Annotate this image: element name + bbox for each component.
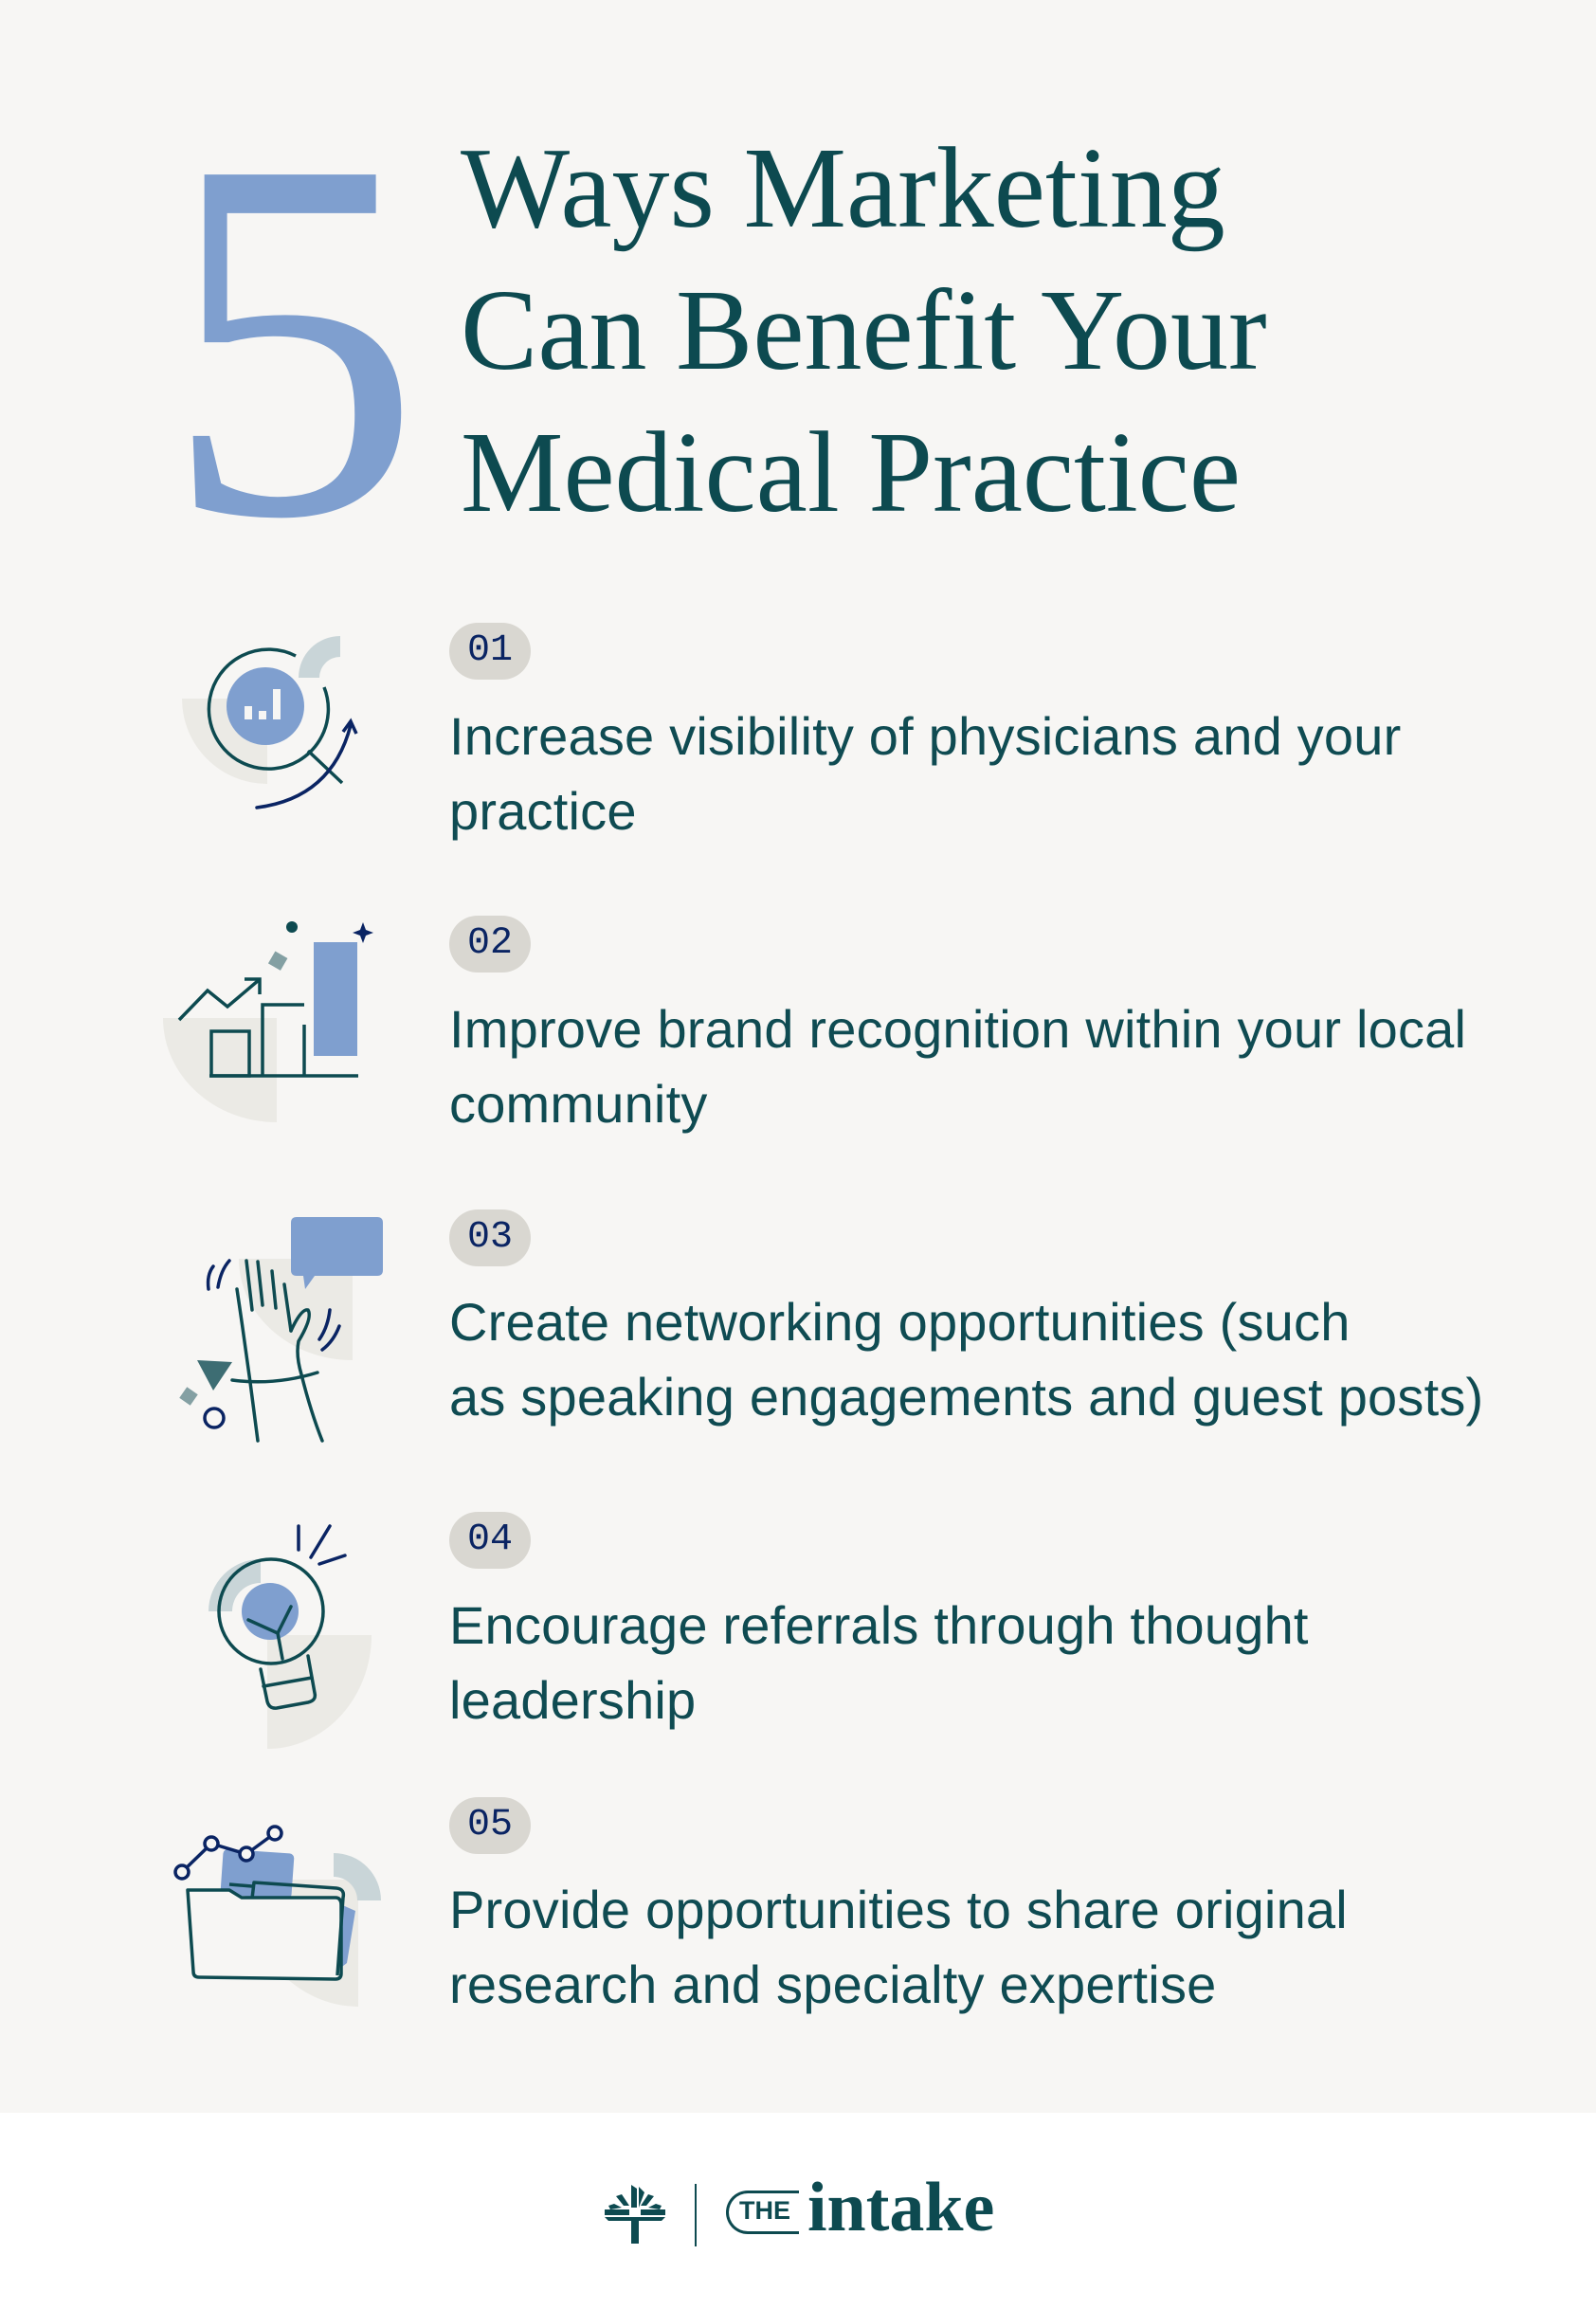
text 2: community: [449, 1074, 708, 1134]
text 4: [449, 1595, 1309, 1730]
text 2: Improve brand recognition within your local: [449, 999, 1466, 1059]
badge 05: [449, 1797, 531, 1854]
text 2: [449, 999, 1466, 1134]
title: [461, 124, 1267, 536]
text 3: as speaking engagements and guest posts): [449, 1367, 1483, 1427]
title: Ways Marketing: [461, 124, 1225, 252]
text 1: [449, 706, 1401, 841]
badge 02: [449, 916, 531, 973]
text 5: [449, 1880, 1348, 2014]
big number 5: 5: [163, 52, 421, 625]
icon: waving hand: [179, 1217, 383, 1443]
icon: light bulb: [209, 1524, 372, 1749]
badge 01: 01: [467, 629, 513, 672]
divider: [695, 2184, 697, 2246]
badge 04: [449, 1512, 531, 1569]
text 1: Increase visibility of physicians and your: [449, 706, 1401, 766]
text 1: practice: [449, 781, 637, 841]
footer: [0, 2113, 1596, 2309]
item 5: [173, 1797, 1348, 2014]
text 4: leadership: [449, 1670, 696, 1730]
logo wordmark: [726, 2169, 994, 2246]
badge 04: 04: [467, 1518, 513, 1561]
text 4: Encourage referrals through thought: [449, 1595, 1309, 1655]
item 3: [179, 1209, 1483, 1443]
badge 02: 02: [467, 922, 513, 965]
logo icon: [605, 2185, 665, 2244]
icon: growth bars: [163, 921, 373, 1122]
text 5: research and specialty expertise: [449, 1954, 1217, 2014]
badge 01: [449, 623, 531, 680]
text 3: Create networking opportunities (such: [449, 1292, 1351, 1352]
badge 03: [449, 1209, 531, 1266]
item 2: [163, 916, 1466, 1134]
icon: magnifier chart: [182, 636, 358, 809]
title: Medical Practice: [461, 409, 1241, 536]
title: Can Benefit Your: [461, 266, 1267, 394]
text 3: [449, 1292, 1483, 1427]
badge 05: 05: [467, 1804, 513, 1846]
badge 03: 03: [467, 1216, 513, 1259]
logo wordmark: intake: [807, 2169, 994, 2246]
logo wordmark: THE: [739, 2196, 790, 2225]
item 4: [209, 1512, 1309, 1749]
text 5: Provide opportunities to share original: [449, 1880, 1348, 1939]
item 1: [182, 623, 1401, 841]
icon: folder with chart: [173, 1825, 381, 2007]
